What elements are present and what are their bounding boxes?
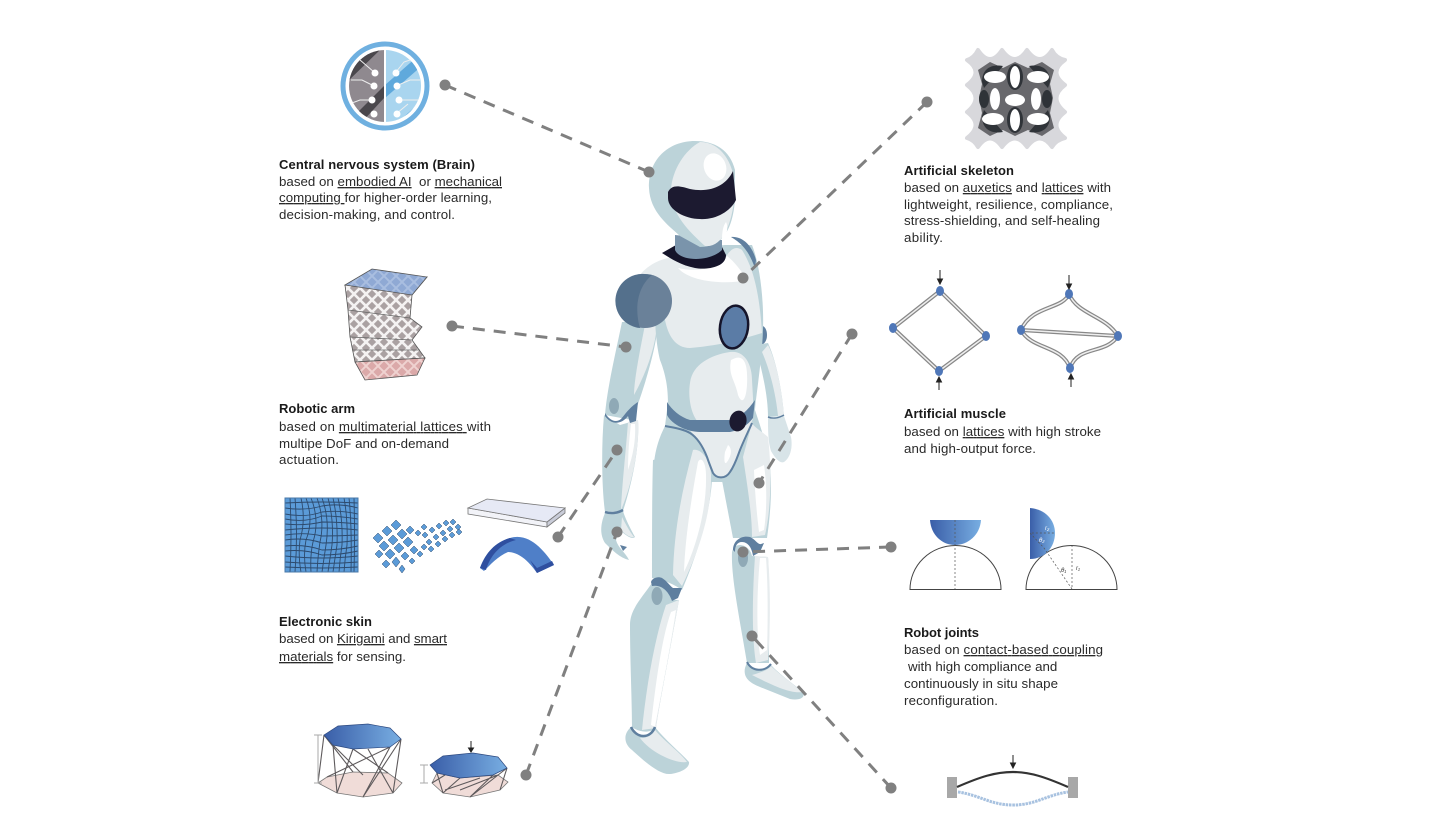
icon: twisted lattice arm <box>345 269 427 380</box>
text: robotic arm: Robotic arm <box>279 401 355 416</box>
text: central nervous system: computing for higher-order learning, <box>279 190 492 205</box>
robot arm near <box>601 320 658 560</box>
connector: muscle <box>754 328 858 488</box>
robot neck and collar <box>662 235 726 269</box>
icon: joint rolled: θ₁ <box>1061 568 1066 574</box>
icon: muscle lattice relaxed <box>889 270 990 390</box>
text: robotic arm: based on multimaterial lattices with <box>279 419 491 434</box>
text: robotic arm <box>279 401 491 467</box>
text: electronic skin <box>279 614 447 664</box>
icon: joint aligned <box>910 520 1001 590</box>
text: electronic skin: materials for sensing. <box>279 649 406 664</box>
text: artificial skeleton: based on auxetics and lattices with <box>904 180 1111 195</box>
icon: octagonal structure compressed <box>420 741 508 797</box>
text: central nervous system: decision-making, and control. <box>279 207 455 222</box>
text: robot joints: with high compliance and <box>907 659 1057 674</box>
text: robot joints: reconfiguration. <box>904 693 998 708</box>
icon: joint rolled: r₁ <box>1076 566 1080 572</box>
robot far leg <box>720 423 804 700</box>
text: robot joints: Robot joints <box>904 625 979 640</box>
text: artificial muscle: based on lattices with high stroke <box>904 424 1101 439</box>
icon: kirigami sheet <box>373 519 462 573</box>
icon: stretchable kirigami grid <box>285 498 358 572</box>
icon: auxetic skeleton lattice <box>967 50 1065 147</box>
text: robot joints <box>904 625 1103 708</box>
icon: buckling beam <box>947 755 1078 805</box>
text: artificial muscle: and high-output force. <box>904 441 1036 456</box>
text: electronic skin: based on Kirigami and smart <box>279 631 447 646</box>
connector: hand to octagon <box>520 526 622 780</box>
text: artificial skeleton: Artificial skeleton <box>904 163 1014 178</box>
text: central nervous system <box>279 157 502 222</box>
robot arm far <box>755 326 792 462</box>
text: robot joints: continuously in situ shape <box>904 676 1058 691</box>
text: artificial skeleton: lightweight, resilience, compliance, <box>904 197 1113 212</box>
text: artificial skeleton: ability. <box>904 230 943 245</box>
icon: brain circuit <box>343 44 427 128</box>
connector: skin <box>552 444 622 542</box>
text: artificial skeleton <box>904 163 1113 245</box>
robot belt <box>667 400 755 433</box>
connector: skeleton <box>738 96 932 284</box>
text: robotic arm: multipe DoF and on-demand <box>279 436 449 451</box>
robot pelvis front panel <box>665 418 753 477</box>
icon: bent arch <box>480 537 554 573</box>
text: central nervous system: based on embodied AI or mechanical <box>279 174 502 189</box>
text: artificial muscle: Artificial muscle <box>904 406 1006 421</box>
icon: flat plate <box>468 499 565 527</box>
text: artificial muscle <box>904 406 1101 456</box>
text: electronic skin: Electronic skin <box>279 614 372 629</box>
robot figure <box>601 141 804 774</box>
robot shoulder <box>615 274 672 328</box>
icon: muscle lattice compressed <box>1017 275 1122 387</box>
text: robotic arm: actuation. <box>279 452 339 467</box>
connector: joints <box>738 542 896 558</box>
robot head <box>649 141 736 247</box>
robot pelvis base <box>653 410 770 482</box>
connector: arm <box>446 320 632 352</box>
robot near leg <box>625 450 712 774</box>
text: central nervous system: Central nervous system (Brain) <box>279 157 475 172</box>
connector: foot to beam <box>746 630 896 794</box>
text: robot joints: based on contact-based coupling <box>904 642 1103 657</box>
icon: joint rolled <box>1026 508 1117 590</box>
icon: octagonal structure expanded <box>314 724 402 797</box>
connector: brain <box>440 80 654 178</box>
icon: joint rolled: r₂ <box>1045 526 1050 532</box>
text: artificial skeleton: stress-shielding, and self-healing <box>904 213 1100 228</box>
robot torso <box>640 237 763 426</box>
robot chest disc <box>717 304 751 350</box>
icon: joint rolled: θ₂ <box>1039 538 1045 544</box>
